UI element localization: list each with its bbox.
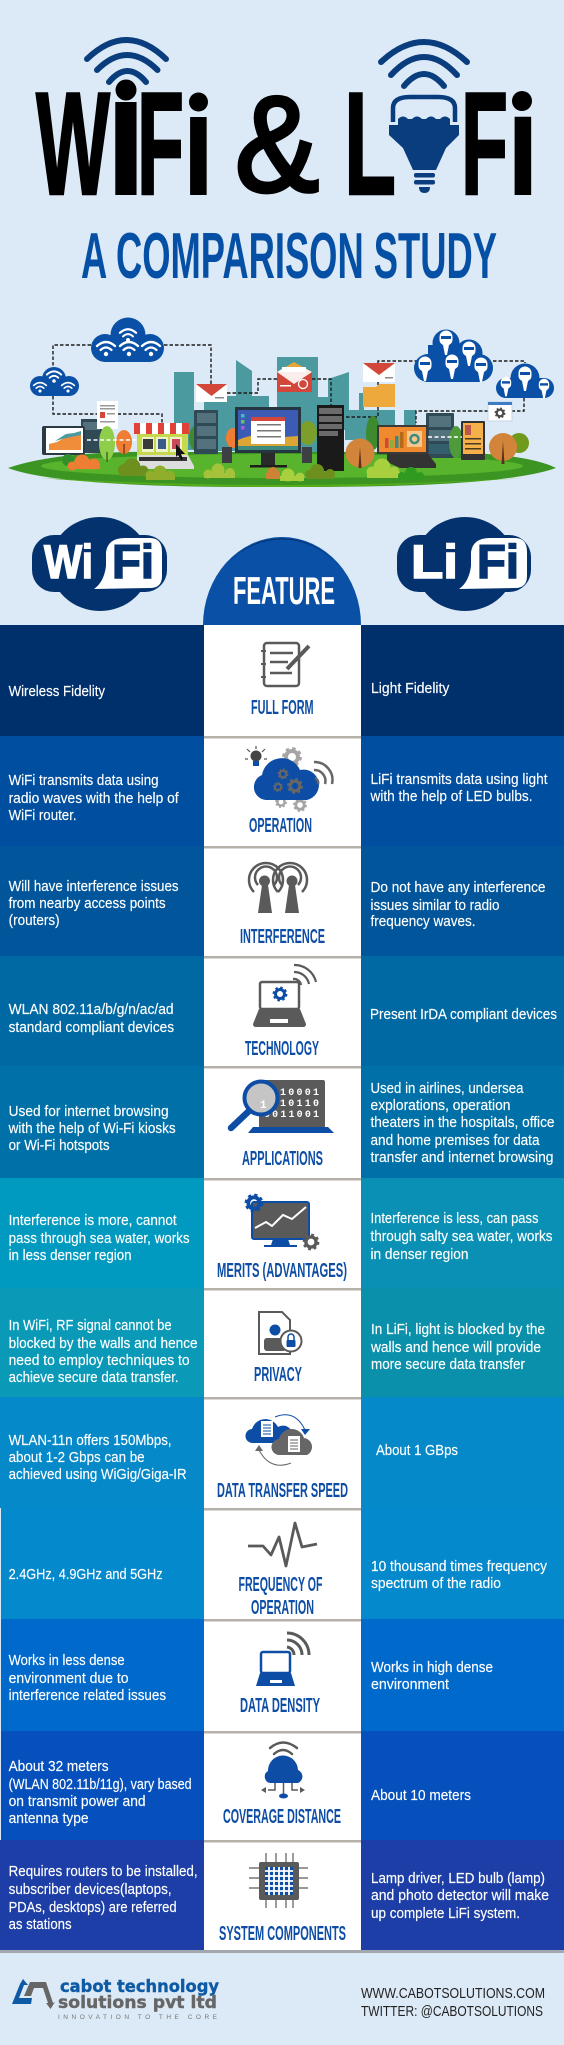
bushes [62, 454, 424, 482]
lifi cell: applications: explorations, operation [370, 1098, 510, 1114]
feature cell: data density: DATA DENSITY [240, 1695, 320, 1717]
logo: WiFi: Fi [112, 535, 154, 588]
footer logo: cabot technology: solutions pvt ltd [58, 1993, 217, 2013]
icon: overlapping towers [249, 863, 307, 913]
title: WiFi & LiFi [35, 37, 532, 196]
white dashed signal lines [87, 437, 462, 440]
word: LiFi with bulb: F [461, 62, 508, 225]
lifi cell: coverage [361, 1731, 564, 1840]
icon: cloud with signal and arrows [261, 1742, 305, 1798]
wifi cell: technology [0, 956, 204, 1066]
icon: phone [449, 421, 485, 460]
logo: WiFi: Wi [44, 535, 93, 588]
row: interference [0, 846, 564, 956]
wifi cell: data transfer speed: achieved using WiGig/Giga-IR [9, 1467, 187, 1483]
lifi cell: interference: issues similar to radio [370, 898, 500, 914]
wifi cell: merits: Interference is more, cannot [9, 1213, 177, 1229]
feature cell: coverage: COVERAGE DISTANCE [223, 1806, 341, 1828]
wifi cell: operation: WiFi transmits data using [9, 773, 159, 789]
trees right of tower [346, 416, 380, 468]
icon: clouds exchanging documents [245, 1415, 312, 1465]
wifi cell: interference: Will have interference issues [9, 879, 179, 895]
wifi cell: frequency [1, 1508, 204, 1619]
footer logo: cabot technology: cabot technology [60, 1977, 219, 1997]
lifi cell: applications: Used in airlines, undersea [370, 1081, 524, 1097]
wifi cell: system components: subscriber devices(laptops, [9, 1882, 172, 1898]
logo: LiFi: Li [411, 535, 458, 588]
feature cell: data density [204, 1619, 361, 1731]
feature cell: frequency: FREQUENCY OF [238, 1574, 322, 1596]
lifi cell: merits: in denser region [370, 1247, 468, 1263]
teal buildings [174, 357, 416, 457]
lifi cell: merits [361, 1178, 564, 1288]
feature cell: data transfer speed [204, 1397, 361, 1508]
word: LiFi with bulb [348, 39, 532, 196]
lifi cell: operation [361, 736, 564, 846]
feature dome heading [203, 537, 361, 625]
wifi cell: data transfer speed: WLAN-11n offers 150Mbps, [9, 1433, 172, 1449]
feature cell: full form [204, 625, 361, 736]
wifi cell: data transfer speed [0, 1397, 204, 1508]
lifi cell: applications [361, 1066, 564, 1178]
feature cell: privacy: PRIVACY [254, 1364, 302, 1386]
table bottom shadow [0, 1950, 564, 1953]
cloud: lifi small [496, 364, 554, 398]
lifi cell: privacy: In LiFi, light is blocked by the [371, 1322, 545, 1338]
feature cell: applications [204, 1066, 361, 1178]
wifi cell: privacy: blocked by the walls and hence [9, 1336, 198, 1352]
feature cell: operation [204, 736, 361, 846]
word: WiFi [35, 37, 208, 196]
icon: document with lock [259, 1312, 302, 1354]
row: data density [1, 1619, 564, 1731]
wifi cell: coverage: (WLAN 802.11b/11g), vary based [9, 1777, 192, 1793]
icon: document [97, 401, 118, 429]
wifi cell: operation: WiFi router. [9, 808, 77, 824]
icon: cabot arrow mark [12, 1979, 55, 2009]
wifi cell: technology: standard compliant devices [9, 1020, 174, 1036]
lifi cell: privacy: more secure data transfer [371, 1357, 525, 1373]
lifi cell: operation: LiFi transmits data using light [370, 772, 548, 788]
cloud: lifi large [414, 330, 493, 382]
wifi cell: data density: interference related issues [9, 1688, 166, 1704]
feature cell: privacy [204, 1288, 361, 1397]
icon: laptop with wifi [253, 965, 316, 1027]
word: LiFi with bulb: i [506, 62, 540, 227]
wifi cell: coverage: on transmit power and [9, 1794, 146, 1810]
icon: binary laptop and magnifier: 1 [260, 1100, 267, 1112]
wifi cell: technology: WLAN 802.11a/b/g/n/ac/ad [9, 1002, 174, 1018]
wifi cell: privacy: In WiFi, RF signal cannot be [9, 1318, 172, 1334]
icon: tablet with chart [42, 426, 85, 455]
wifi cell: interference: from nearby access points [9, 896, 166, 912]
wifi cell: full form [0, 625, 204, 736]
cloud: wifi small [30, 367, 79, 396]
row: system components [0, 1840, 564, 1950]
icon: envelope right [363, 363, 395, 382]
icon: binary laptop and magnifier: 10110 [280, 1099, 319, 1110]
word: WiFi: i [104, 37, 148, 233]
word: WiFi: i [182, 62, 215, 227]
feature dome heading: FEATURE [233, 570, 335, 613]
wifi cell: operation: radio waves with the help of [9, 791, 180, 807]
lifi cell: interference: frequency waves. [370, 914, 476, 930]
lifi cell: operation: with the help of LED bulbs. [370, 789, 532, 805]
lifi cell: system components [361, 1840, 564, 1950]
lifi cell: data density: Works in high dense [371, 1660, 493, 1676]
row: frequency of operation [1, 1508, 564, 1619]
feature cell: merits [204, 1178, 361, 1288]
feature cell: interference [204, 846, 361, 956]
footer contact details [361, 1985, 545, 2020]
wifi cell: merits: pass through sea water, works [9, 1231, 190, 1247]
lifi cell: technology [361, 956, 564, 1066]
lifi cell: full form: Light Fidelity [371, 681, 450, 697]
icon: bulb with signal [381, 42, 467, 193]
ampersand: & [235, 68, 319, 220]
icon: envelope left [196, 384, 227, 402]
wifi cell: applications: Used for internet browsing [9, 1104, 169, 1120]
wifi cell: full form: Wireless Fidelity [9, 684, 106, 700]
footer logo: cabot technology: INNOVATION TO THE CORE [58, 2014, 218, 2021]
row: merits [0, 1178, 564, 1288]
lifi cell: system components: Lamp driver, LED bulb (lamp) [371, 1871, 545, 1887]
wifi cell: merits: in less denser region [9, 1248, 132, 1264]
feature cell: frequency: OPERATION [251, 1597, 314, 1619]
icon: cloud with gears [245, 746, 332, 811]
icon: binary laptop and magnifier [231, 1080, 334, 1133]
wifi cell: privacy [0, 1288, 204, 1397]
word: WiFi: F [137, 62, 184, 225]
ground [8, 452, 556, 487]
word: WiFi: W [36, 62, 110, 225]
wifi cell: data density [1, 1619, 204, 1731]
illustration: connected city [8, 318, 556, 487]
wifi cell: system components: PDAs, desktops) are referred [9, 1900, 177, 1916]
icon: left server [81, 419, 102, 453]
wifi cell: applications: with the help of Wi-Fi kiosks [8, 1121, 176, 1137]
icon: desktop monitor [235, 407, 301, 468]
cloud: wifi large [91, 318, 164, 362]
feature cell: merits: MERITS (ADVANTAGES) [217, 1260, 347, 1282]
wifi cell: frequency: 2.4GHz, 4.9GHz and 5GHz [9, 1567, 163, 1583]
icon: microchip [249, 1853, 308, 1908]
lifi cell: frequency: 10 thousand times frequency [371, 1559, 548, 1575]
feature cell: applications: APPLICATIONS [242, 1148, 323, 1170]
lifi cell: frequency [361, 1508, 564, 1619]
icon: laptop with bar chart [377, 425, 436, 468]
wifi cell: interference: (routers) [9, 913, 60, 929]
footer logo: cabot technology [12, 1977, 219, 2021]
wifi cell: data density: environment due to [9, 1671, 129, 1687]
wifi cell: merits [0, 1178, 204, 1288]
wifi cell: privacy: need to employ techniques to [9, 1353, 190, 1369]
icon: right server [426, 413, 454, 458]
icon: tower computer [317, 405, 344, 471]
trees left [99, 425, 205, 462]
lifi cell: data density [361, 1619, 564, 1731]
feature cell: interference: INTERFERENCE [240, 926, 325, 948]
icon: folder [363, 384, 395, 407]
feature cell: frequency [204, 1508, 361, 1619]
lifi cell: merits: through salty sea water, works [370, 1229, 552, 1245]
trees far right [489, 433, 529, 464]
wifi cell: system components: Requires routers to be installed, [9, 1864, 198, 1880]
lifi cell: system components: and photo detector will make [371, 1888, 549, 1904]
feature cell: operation: OPERATION [249, 815, 312, 837]
row: technology [0, 956, 564, 1066]
logo: LiFi: Fi [477, 535, 519, 588]
feature cell: full form: FULL FORM [251, 697, 314, 719]
lifi cell: applications: and home premises for data [370, 1133, 540, 1149]
icon: pulse line [248, 1523, 317, 1566]
lifi cell: data density: environment [371, 1677, 449, 1693]
icon: notebook and pen [261, 643, 309, 686]
dashed network links [53, 345, 525, 423]
wifi cell: system components: as stations [9, 1917, 72, 1933]
lifi cell: system components: up complete LiFi system. [371, 1906, 520, 1922]
icon: monitor with chart and gears [246, 1195, 318, 1249]
row: coverage distance [1, 1731, 564, 1840]
wifi cell: operation [0, 736, 204, 846]
icon: settings window [488, 402, 512, 421]
icon: binary laptop and magnifier: 10001 [280, 1088, 319, 1099]
word: LiFi with bulb: L [344, 62, 396, 225]
feature cell: system components [204, 1840, 361, 1950]
wifi cell: system components [0, 1840, 204, 1950]
wifi cell: applications: or Wi-Fi hotspots [9, 1138, 110, 1154]
wifi cell: coverage [1, 1731, 204, 1840]
icon: blue laptop with signal [256, 1633, 309, 1686]
lifi cell: merits: Interference is less, can pass [370, 1211, 538, 1227]
lifi cell: data transfer speed: About 1 GBps [376, 1443, 458, 1459]
row: privacy [0, 1288, 564, 1397]
row: applications [0, 1066, 564, 1178]
lifi cell: interference [361, 846, 564, 956]
lifi cell: privacy [361, 1288, 564, 1397]
wifi cell: interference [0, 846, 204, 956]
row: full form [0, 625, 564, 736]
row: operation [0, 736, 564, 846]
feature cell: data transfer speed: DATA TRANSFER SPEED [217, 1480, 348, 1502]
feature cell: technology [204, 956, 361, 1066]
wifi cell: privacy: achieve secure data transfer. [9, 1370, 179, 1386]
wifi cell: coverage: About 32 meters [9, 1759, 109, 1775]
lifi cell: frequency: spectrum of the radio [371, 1576, 501, 1592]
lifi cell: full form [361, 625, 564, 736]
lifi cell: interference: Do not have any interference [370, 880, 546, 896]
logo: WiFi [32, 517, 167, 611]
wifi cell: data density: Works in less dense [9, 1653, 125, 1669]
wifi cell: data transfer speed: about 1-2 Gbps can be [9, 1450, 145, 1466]
row: data transfer speed [0, 1397, 564, 1508]
lifi cell: applications: theaters in the hospitals, office [370, 1115, 554, 1131]
feature cell: coverage [204, 1731, 361, 1840]
wifi cell: coverage: antenna type [9, 1811, 89, 1827]
lifi cell: applications: transfer and internet browsing [370, 1150, 554, 1166]
lifi cell: coverage: About 10 meters [371, 1788, 471, 1804]
lifi cell: data transfer speed [361, 1397, 564, 1508]
lifi cell: privacy: walls and hence will provide [370, 1340, 541, 1356]
icon: shop on laptop [134, 423, 194, 469]
feature cell: technology: TECHNOLOGY [245, 1038, 319, 1060]
feature cell: system components: SYSTEM COMPONENTS [219, 1923, 346, 1945]
wifi cell: applications [0, 1066, 204, 1178]
icon: binary laptop and magnifier: 0011001 [264, 1110, 319, 1121]
icon: center-left server [194, 410, 218, 454]
trees and speakers center [222, 421, 317, 463]
icon: red envelope with at sign [277, 362, 312, 392]
logo: LiFi [397, 517, 531, 611]
